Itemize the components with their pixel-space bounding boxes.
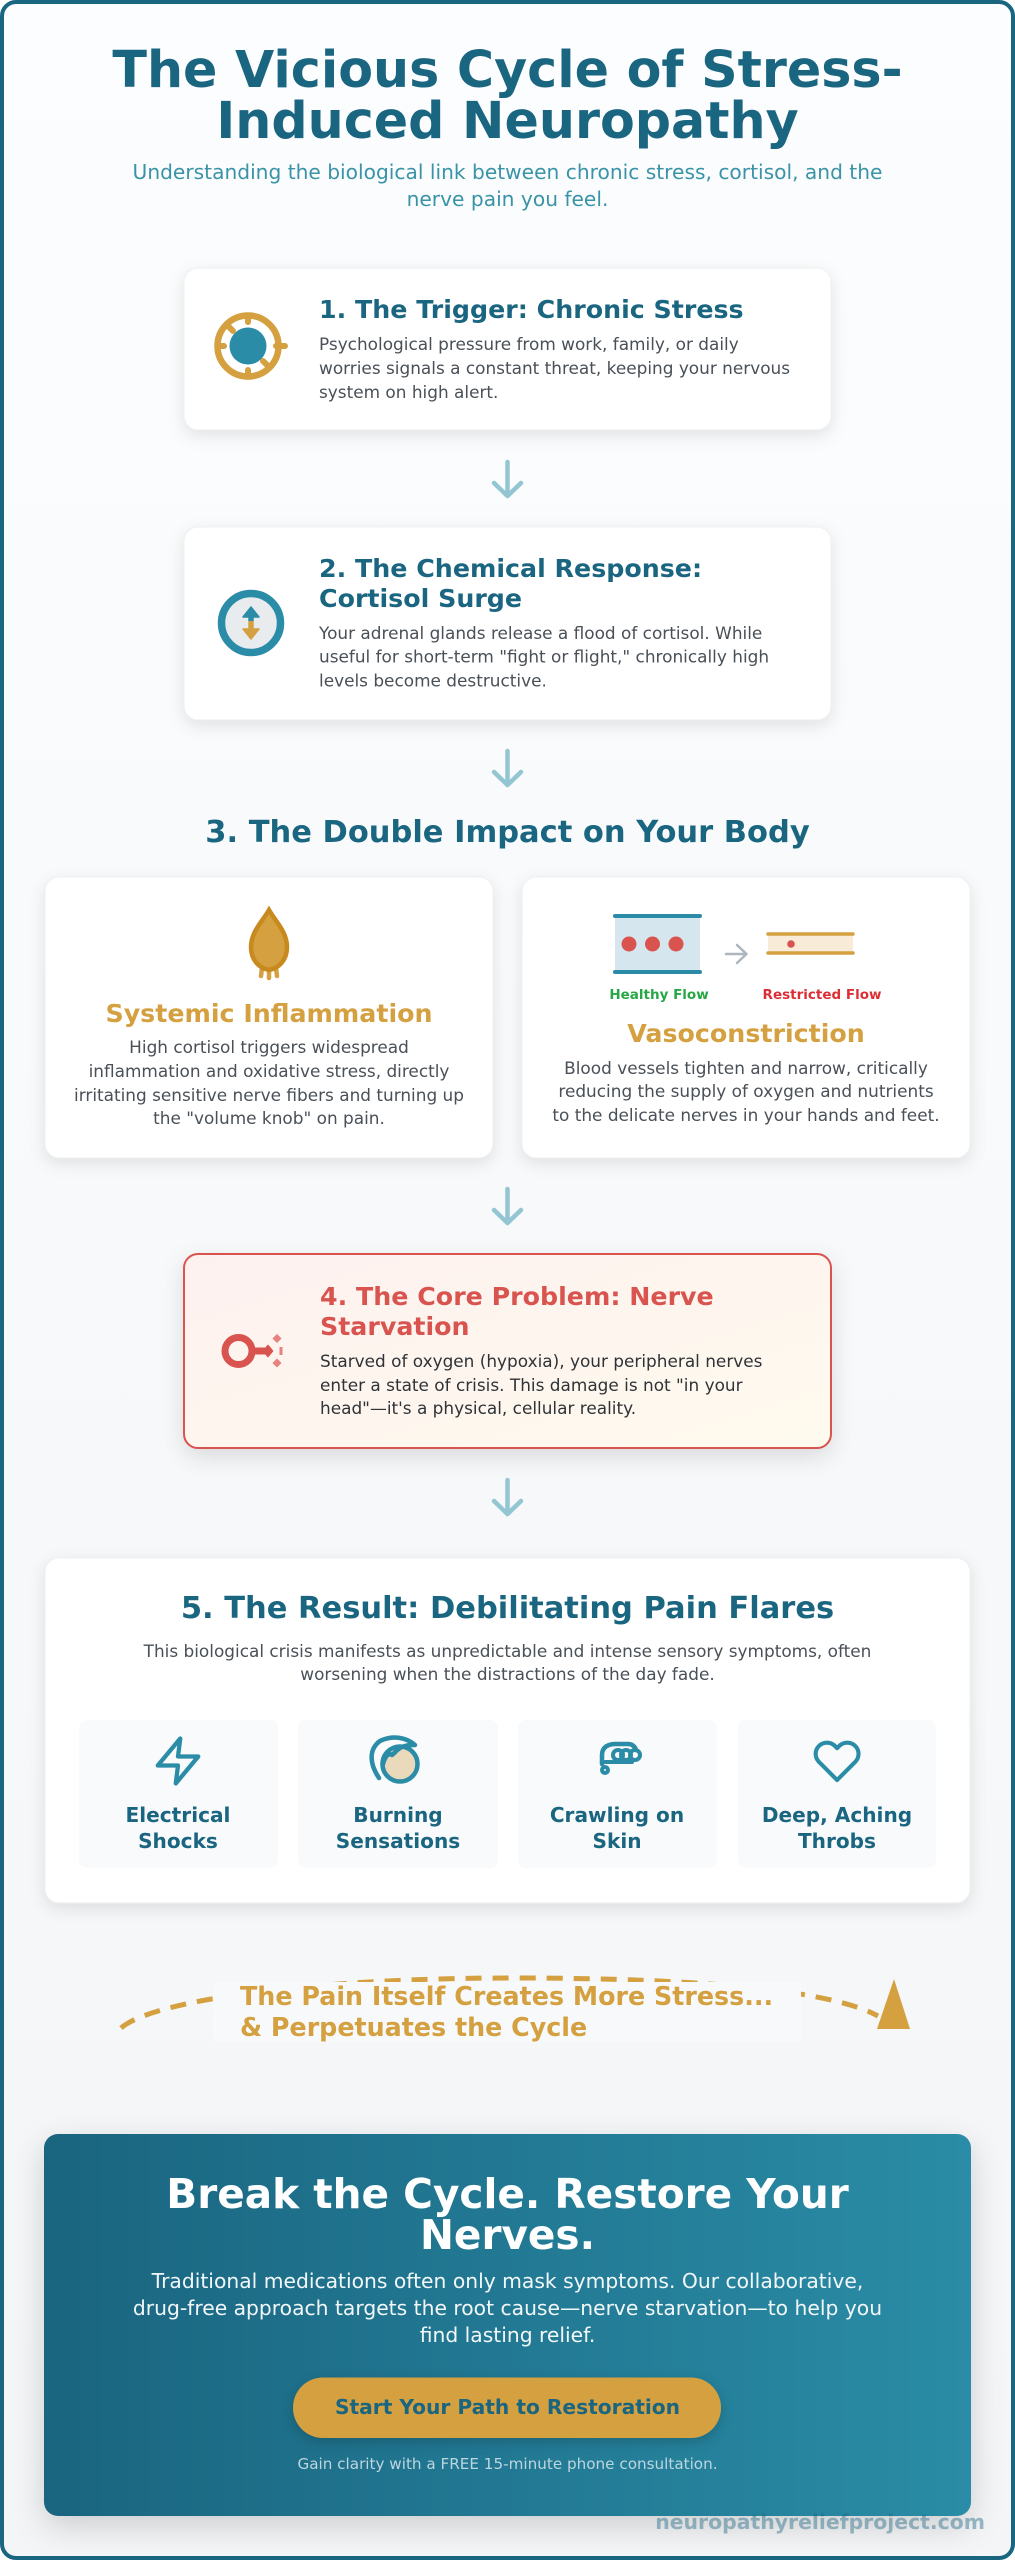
inflammation heading: Systemic Inflammation	[105, 999, 433, 1028]
icon: stress target	[218, 316, 285, 376]
icon: burning orb	[372, 1738, 418, 1782]
subtitle: Understanding the biological link between chronic stress, cortisol, and the	[133, 160, 882, 184]
arrow: step 3 to 4	[494, 1189, 521, 1223]
step 1 text: worries signals a constant threat, keeping your nervous	[319, 358, 790, 378]
step 4 heading: Starvation	[320, 1312, 470, 1341]
icon: cortisol gauge	[222, 594, 280, 652]
step 5 text: worsening when the distractions of the day fade.	[300, 1664, 715, 1684]
cta heading	[166, 2170, 849, 2259]
vasoconstriction text	[552, 1058, 940, 1125]
callout	[213, 1981, 801, 2042]
icon: flame	[251, 910, 287, 978]
cta text: drug-free approach targets the root cause—nerve starvation—to help you	[133, 2296, 882, 2320]
inflammation text: irritating sensitive nerve fibers and turning up	[74, 1085, 464, 1105]
step 2 text: useful for short-term "fight or flight," chronically high	[319, 646, 769, 666]
vasoconstriction text: to the delicate nerves in your hands and feet.	[552, 1105, 940, 1125]
label: deep aching throbs: Deep, Aching	[762, 1803, 912, 1827]
step 2 text: Your adrenal glands release a flood of cortisol. While	[318, 623, 762, 643]
arrow: step 2 to 3	[494, 751, 521, 785]
button: Start Your Path to Restoration	[335, 2395, 680, 2419]
panel: systemic inflammation	[45, 877, 493, 1158]
label: burning sensations	[336, 1803, 460, 1853]
healthy vessel	[615, 916, 700, 972]
step 4 heading: 4. The Core Problem: Nerve	[320, 1282, 714, 1311]
label: crawling on skin: Skin	[592, 1829, 642, 1853]
label: burning sensations: Sensations	[336, 1829, 460, 1853]
title	[112, 40, 903, 150]
restricted vessel	[768, 934, 853, 953]
cta text: find lasting relief.	[420, 2323, 595, 2347]
cta heading: Break the Cycle. Restore Your	[166, 2170, 849, 2218]
watermark: neuropathyreliefproject.com	[655, 2510, 985, 2534]
subtitle	[133, 160, 882, 211]
step 1 heading: 1. The Trigger: Chronic Stress	[319, 295, 744, 324]
arrow: step 4 to 5	[494, 1480, 521, 1514]
label: healthy flow: Healthy Flow	[609, 987, 709, 1003]
vasoconstriction text: reducing the supply of oxygen and nutrients	[558, 1081, 934, 1101]
title: The Vicious Cycle of Stress-	[112, 40, 903, 99]
label: deep aching throbs: Throbs	[798, 1829, 876, 1853]
vasoconstriction text: Blood vessels tighten and narrow, critically	[564, 1058, 928, 1078]
arrow: dashed loop arc	[121, 1978, 878, 2028]
label: deep aching throbs	[762, 1803, 912, 1853]
symptom: deep aching throbs	[738, 1720, 936, 1868]
inflammation text	[74, 1037, 464, 1128]
label: crawling on skin	[550, 1803, 684, 1853]
arrow: step 1 to 2	[494, 462, 521, 496]
icon: crawling nerve	[602, 1744, 640, 1773]
arrow: healthy to restricted	[726, 945, 746, 963]
symptom: electrical shocks	[79, 1720, 278, 1868]
chart: vessel comparison	[609, 916, 881, 1003]
label: electrical shocks	[126, 1803, 230, 1853]
step 5 text	[143, 1641, 871, 1684]
symptom: burning sensations	[298, 1720, 498, 1868]
callout: The Pain Itself Creates More Stress...	[240, 1981, 773, 2011]
step 4 text	[320, 1351, 762, 1418]
inflammation text: the "volume knob" on pain.	[153, 1108, 385, 1128]
cta text: Traditional medications often only mask symptoms. Our collaborative,	[151, 2269, 863, 2293]
callout: & Perpetuates the Cycle	[240, 2012, 587, 2042]
vasoconstriction heading: Vasoconstriction	[627, 1019, 865, 1048]
panel: call to action	[44, 2134, 971, 2516]
panel: vasoconstriction	[522, 877, 970, 1158]
step 4 heading	[320, 1282, 714, 1341]
panel: step 4 nerve starvation	[184, 1254, 831, 1448]
step 5 heading: 5. The Result: Debilitating Pain Flares	[181, 1591, 834, 1626]
label: crawling on skin: Crawling on	[550, 1803, 684, 1827]
panel: step 1 trigger	[184, 268, 831, 430]
step 1 text	[319, 334, 790, 402]
step 4 text: head"—it's a physical, cellular reality.	[320, 1398, 636, 1418]
label: restricted flow: Restricted Flow	[763, 987, 881, 1003]
cta heading: Nerves.	[420, 2211, 595, 2259]
cta text	[133, 2269, 882, 2347]
label: electrical shocks: Shocks	[138, 1829, 218, 1853]
subtitle: nerve pain you feel.	[407, 187, 608, 211]
panel: step 5 result	[45, 1558, 970, 1903]
panel: step 2 cortisol	[184, 527, 831, 720]
label: electrical shocks: Electrical	[126, 1803, 230, 1827]
step 2 heading: Cortisol Surge	[319, 584, 522, 613]
label: burning sensations: Burning	[353, 1803, 443, 1827]
icon: lightning bolt	[158, 1738, 198, 1784]
step 4 text: enter a state of crisis. This damage is not "in your	[320, 1375, 743, 1395]
title: Induced Neuropathy	[216, 91, 799, 150]
symptom: crawling on skin	[518, 1720, 717, 1868]
step 2 text: levels become destructive.	[319, 670, 547, 690]
heading: double impact: 3. The Double Impact on Your Body	[205, 815, 810, 850]
feedback loop	[121, 1978, 910, 2042]
footnote: Gain clarity with a FREE 15-minute phone consultation.	[297, 2455, 718, 2473]
step 1 text: Psychological pressure from work, family, or daily	[319, 334, 739, 354]
button	[293, 2378, 721, 2438]
icon: heart	[816, 1743, 859, 1780]
step 2 text	[318, 623, 769, 690]
step 4 text: Starved of oxygen (hypoxia), your peripheral nerves	[320, 1351, 762, 1371]
step 2 heading: 2. The Chemical Response:	[319, 554, 702, 583]
inflammation text: High cortisol triggers widespread	[129, 1037, 409, 1057]
step 2 heading	[319, 554, 702, 613]
inflammation text: inflammation and oxidative stress, directly	[89, 1061, 449, 1081]
step 5 text: This biological crisis manifests as unpredictable and intense sensory symptoms, often	[143, 1641, 871, 1661]
arrow head	[877, 1979, 910, 2029]
icon: starved nerve	[225, 1335, 281, 1366]
step 1 text: system on high alert.	[319, 382, 498, 402]
